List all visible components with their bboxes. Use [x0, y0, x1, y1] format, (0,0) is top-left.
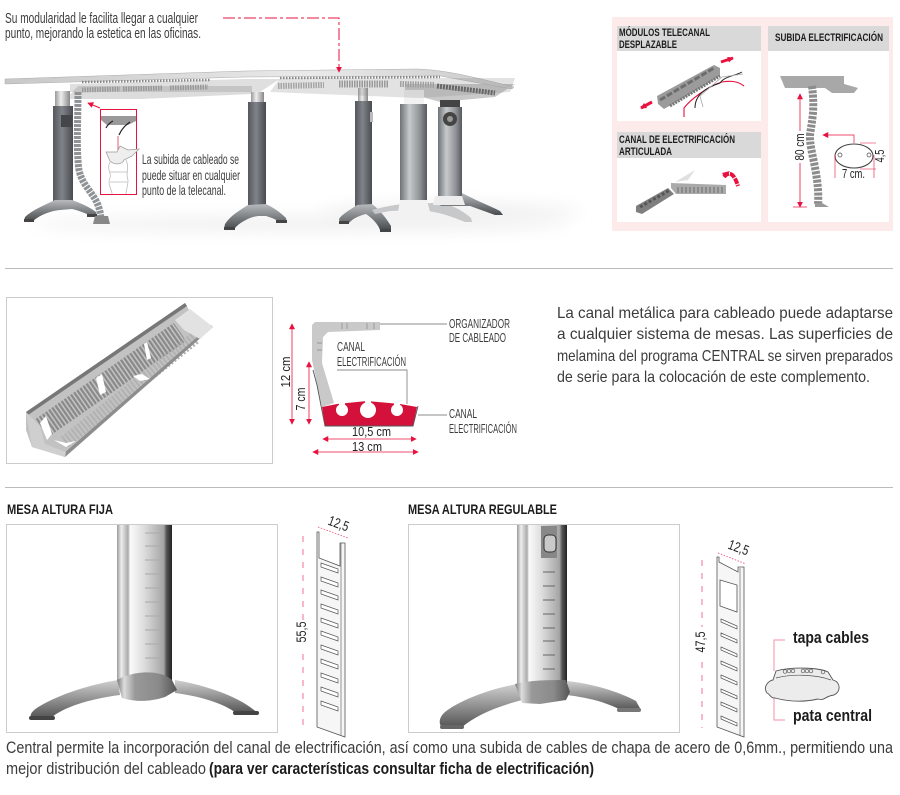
diagram captions: CANAL — [337, 340, 365, 354]
panel: module details — [612, 17, 893, 231]
diagram captions: ORGANIZADOR — [449, 317, 510, 331]
divider — [5, 486, 893, 488]
panel: módulos telecanal: DESPLAZABLE — [619, 39, 677, 51]
table top — [5, 69, 514, 89]
top intro text — [5, 11, 201, 42]
strip diagram: fixed — [293, 512, 351, 737]
diagram captions: ELECTRIFICACIÓN — [337, 354, 406, 369]
dimension labels — [278, 356, 391, 454]
top intro text: punto, mejorando la estetica en las oficinas. — [5, 26, 201, 42]
table legs — [24, 88, 503, 232]
riser cable — [77, 92, 101, 220]
inset caption — [142, 151, 240, 198]
panel: subida electrificación: 4,5 — [872, 150, 887, 162]
heading: mesa altura fija: MESA ALTURA FIJA — [7, 501, 113, 517]
bottom description: (para ver características consultar ficha de electrificación) — [209, 760, 594, 778]
panel: módulos telecanal — [617, 26, 761, 121]
red channel — [322, 401, 417, 426]
strip diagram: adjustable: 12,5 — [726, 536, 751, 558]
dimension labels: 10,5 cm — [352, 424, 391, 439]
inset caption: puede situar en cualquier — [142, 167, 240, 183]
leg cross-section with callouts: pata central — [793, 706, 872, 725]
channel cross-section diagram — [278, 317, 517, 454]
panel: fixed leg photo — [6, 524, 278, 732]
top intro text: Su modularidad le facilita llegar a cualquier — [5, 11, 198, 27]
dimension labels: 12 cm — [278, 356, 293, 388]
diagram captions: ELECTRIFICACIÓN — [449, 421, 517, 436]
dimension labels: 13 cm — [352, 439, 382, 454]
panel: subida electrificación: 7 cm. — [842, 166, 865, 181]
strip diagram: adjustable: 47,5 — [692, 631, 708, 652]
panel: canal articulada — [617, 132, 761, 222]
table photo — [5, 18, 580, 232]
cable channels — [70, 77, 515, 98]
leg cross-section with callouts — [765, 628, 872, 725]
red dashed pointer — [223, 18, 339, 72]
dimension labels: 7 cm — [293, 388, 308, 410]
panel: módulos telecanal: MÓDULOS TELECANAL — [619, 26, 710, 39]
leg cross-section with callouts: tapa cables — [793, 628, 869, 647]
heading: mesa altura regulable: MESA ALTURA REGULABLE — [408, 501, 557, 517]
bottom description: mejor distribución del cableado — [6, 760, 206, 778]
divider — [5, 268, 893, 270]
inset caption: La subida de cableado se — [142, 151, 239, 167]
inset detail box — [88, 103, 139, 194]
dimension arrows — [292, 324, 418, 452]
description paragraph — [557, 305, 893, 386]
leader lines — [337, 324, 447, 415]
diagram captions — [337, 317, 517, 436]
bottom description — [6, 739, 894, 778]
cable organizer profile — [312, 322, 380, 407]
diagram captions: CANAL — [449, 407, 477, 421]
strip diagram: fixed: 12,5 — [326, 512, 351, 534]
inset caption: punto de la telecanal. — [142, 182, 226, 198]
description paragraph: de serie para la colocación de este complemento. — [557, 369, 870, 386]
diagram captions: DE CABLEADO — [449, 331, 506, 345]
panel: canal articulada: CANAL DE ELECTRIFICACIÓN — [619, 133, 735, 146]
strip diagram: adjustable — [692, 536, 751, 737]
panel: subida electrificación — [768, 26, 889, 222]
strip diagram: fixed: 55,5 — [293, 621, 309, 642]
description paragraph: a cualquier sistema de mesas. Las superficies de — [557, 326, 893, 343]
panel: adjustable leg photo — [408, 524, 680, 732]
panel: subida electrificación: 80 cm — [792, 134, 807, 160]
panel: canal articulada: ARTICULADA — [619, 146, 672, 158]
panel: metal channel photo — [6, 298, 272, 464]
